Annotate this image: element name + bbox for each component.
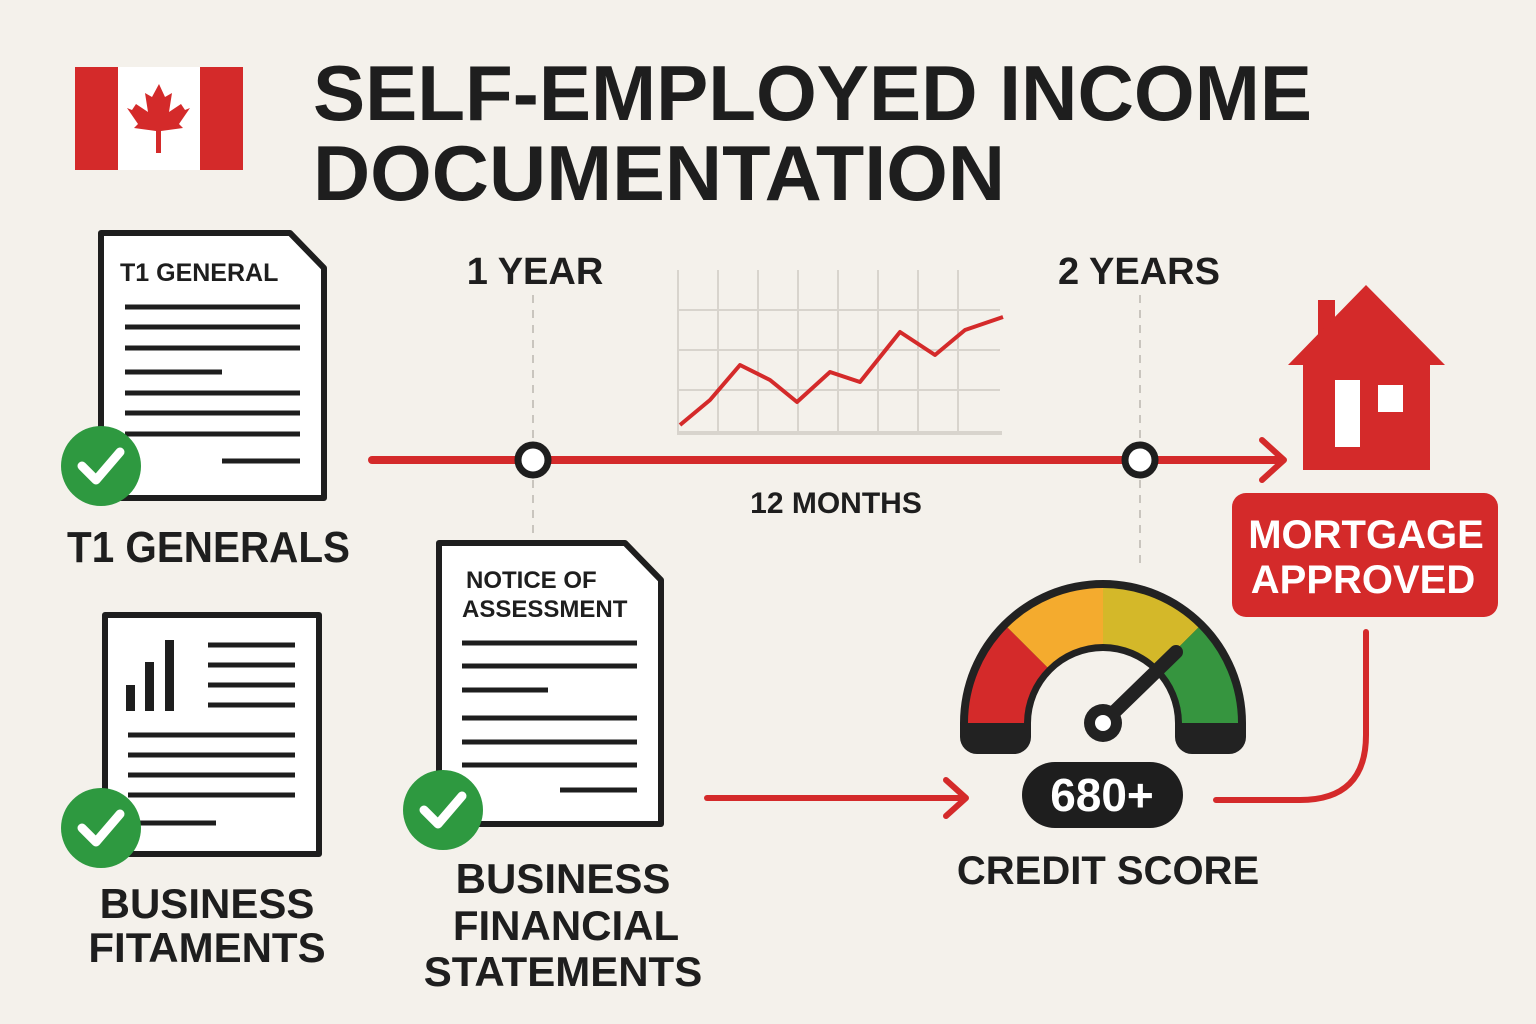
label: business fitaments: BUSINESS [100, 880, 314, 927]
icon: check business [61, 788, 141, 868]
label: 12 months: 12 MONTHS [750, 487, 922, 520]
document: notice of assessment: NOTICE OF [466, 567, 597, 594]
label: T1 generals: T1 GENERALS [67, 523, 350, 572]
icon: house [1288, 285, 1445, 470]
document: business statements [105, 615, 319, 854]
icon: canadian flag [75, 67, 243, 170]
chart: credit gauge [960, 580, 1246, 754]
label: business fitaments [88, 880, 326, 971]
document: T1 general: T1 GENERAL [120, 259, 278, 287]
timeline arrow [372, 440, 1284, 480]
callout: mortgage approved [1232, 493, 1498, 617]
label: credit score: CREDIT SCORE [957, 849, 1259, 893]
document: notice of assessment: ASSESSMENT [462, 596, 628, 623]
callout: mortgage approved: APPROVED [1251, 558, 1475, 602]
label: 1 year: 1 YEAR [467, 251, 603, 293]
title: DOCUMENTATION [313, 129, 1005, 217]
label: 2 years: 2 YEARS [1058, 251, 1220, 293]
label: business financial statements: BUSINESS [456, 855, 670, 902]
timeline dashed markers [533, 295, 1140, 570]
label: business financial statements: FINANCIAL [453, 902, 679, 949]
badge: 680+ [1022, 762, 1183, 828]
label: business financial statements [424, 855, 702, 995]
icon: check T1 [61, 426, 141, 506]
title [313, 49, 1312, 217]
connector: credit to mortgage [1216, 632, 1366, 800]
chart: income growth [678, 270, 1003, 435]
badge: 680+: 680+ [1050, 769, 1154, 821]
document: notice of assessment [439, 543, 661, 824]
label: business financial statements: STATEMENTS [424, 948, 702, 995]
icon: check notice [403, 770, 483, 850]
label: business fitaments: FITAMENTS [88, 924, 326, 971]
document: T1 general [101, 233, 324, 498]
callout: mortgage approved: MORTGAGE [1248, 513, 1484, 557]
title: SELF-EMPLOYED INCOME [313, 49, 1312, 137]
arrow: to credit score [707, 780, 966, 816]
